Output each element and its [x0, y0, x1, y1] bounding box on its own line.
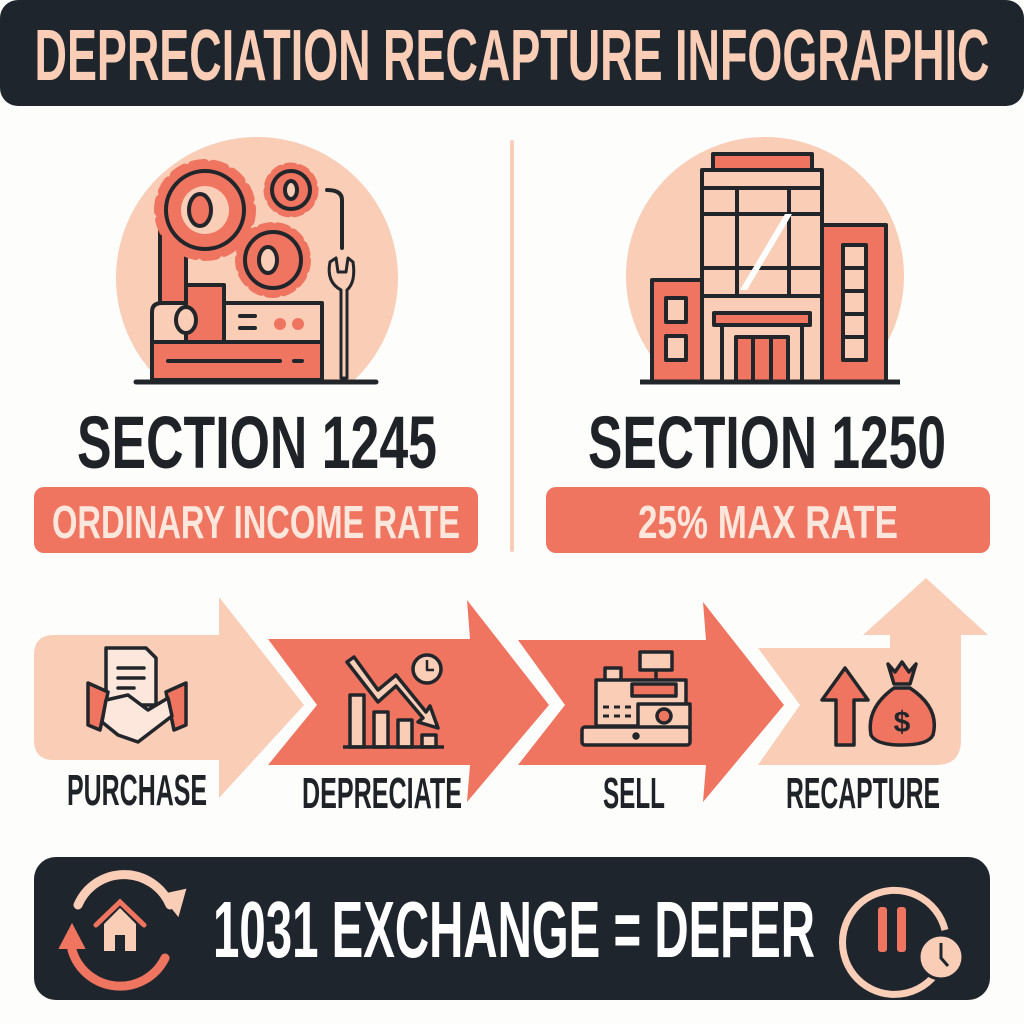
label: purchase: PURCHASE: [67, 766, 207, 815]
arrow: sell: [518, 602, 784, 818]
icon: pause with clock: [842, 890, 963, 994]
arrow: recapture (up): [758, 578, 988, 818]
icon: up arrow and money bag: [822, 662, 934, 745]
arrow: purchase: [34, 597, 304, 815]
icon: handshake contract: [88, 648, 186, 742]
icon: cash register: [582, 652, 690, 745]
icon: declining chart: [343, 655, 444, 747]
label: sell: SELL: [603, 769, 665, 818]
heading: section 1245: SECTION 1245: [77, 401, 437, 484]
icon: building: [626, 137, 904, 384]
pill: 25% max rate: [546, 487, 990, 553]
pill: 25% max rate: 25% MAX RATE: [638, 496, 898, 548]
bottom banner: 1031 exchange: [34, 857, 990, 1000]
label: depreciate: DEPRECIATE: [302, 769, 462, 818]
icon: house exchange cycle: [60, 875, 185, 986]
pill: ordinary income rate: [34, 487, 478, 553]
icon: machinery gears: [116, 137, 398, 384]
arrow: depreciate: [268, 600, 549, 818]
panel: section 1250: [546, 137, 990, 553]
icon: up arrow and money bag: $: [894, 706, 911, 739]
process flow: [34, 578, 988, 818]
pill: ordinary income rate: ORDINARY INCOME RATE: [52, 496, 460, 548]
panel: section 1245: [34, 137, 478, 553]
